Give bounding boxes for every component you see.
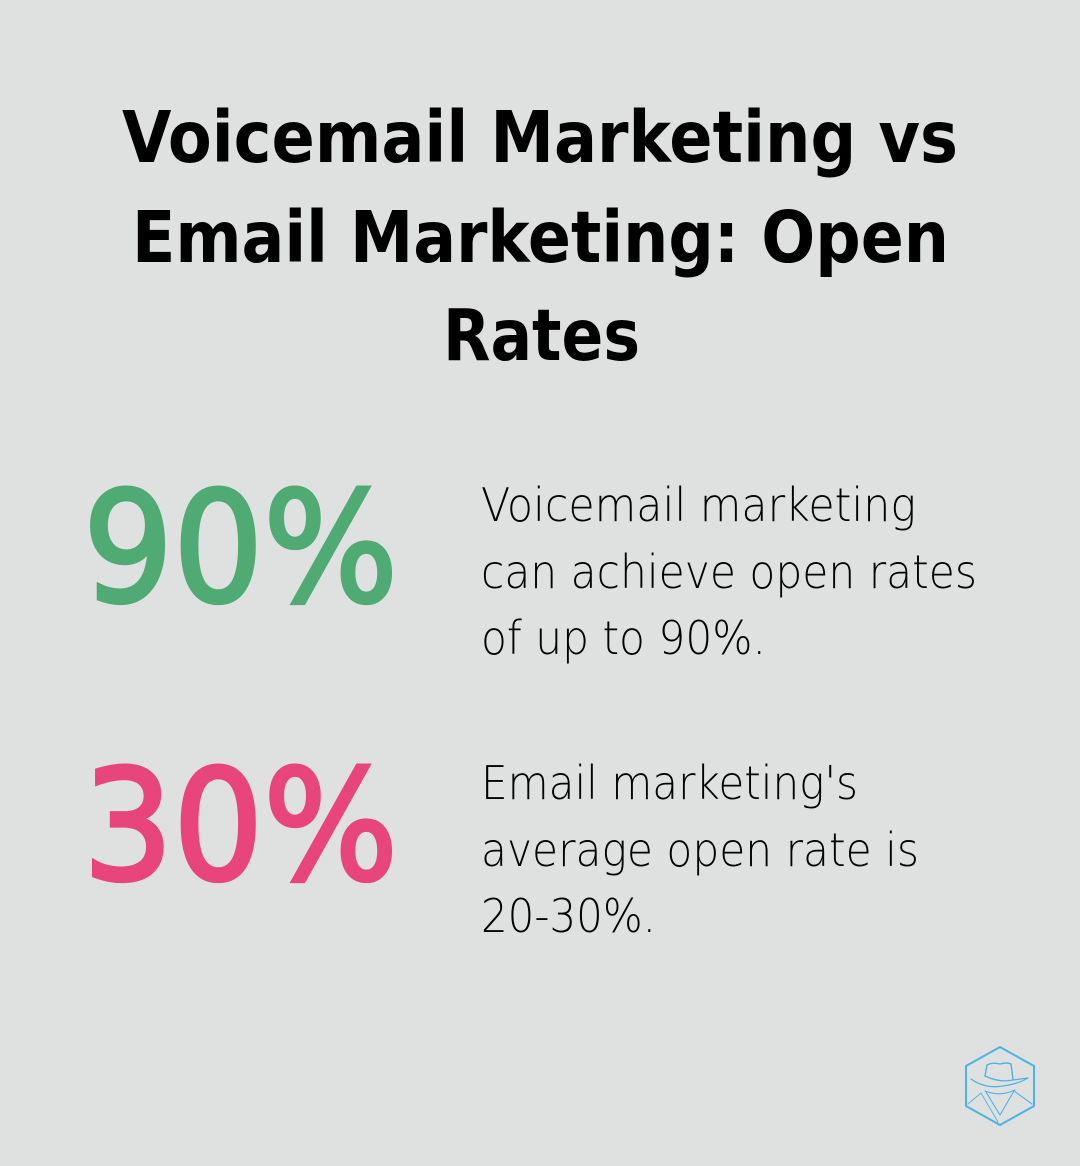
description: email open rates xyxy=(481,756,919,943)
stat: 30% email xyxy=(83,738,919,943)
title: Email Marketing: Open xyxy=(132,196,949,279)
number: 90%: 90% xyxy=(83,460,398,638)
title: Rates xyxy=(443,294,640,377)
description: email open rates: average open rate is xyxy=(481,823,919,877)
description: voicemail open rates: of up to 90%. xyxy=(481,611,766,665)
description: email open rates: 20-30%. xyxy=(481,889,656,943)
description: voicemail open rates: can achieve open rates xyxy=(481,545,977,599)
description: voicemail open rates xyxy=(481,478,977,665)
description: voicemail open rates: Voicemail marketing xyxy=(481,478,916,532)
stat: 90% voicemail xyxy=(83,460,977,665)
title: Voicemail Marketing vs xyxy=(122,96,958,179)
title xyxy=(122,96,958,377)
number: 30%: 30% xyxy=(83,738,398,916)
description: email open rates: Email marketing's xyxy=(481,756,858,810)
icon: hexagon spy logo xyxy=(966,1047,1034,1125)
